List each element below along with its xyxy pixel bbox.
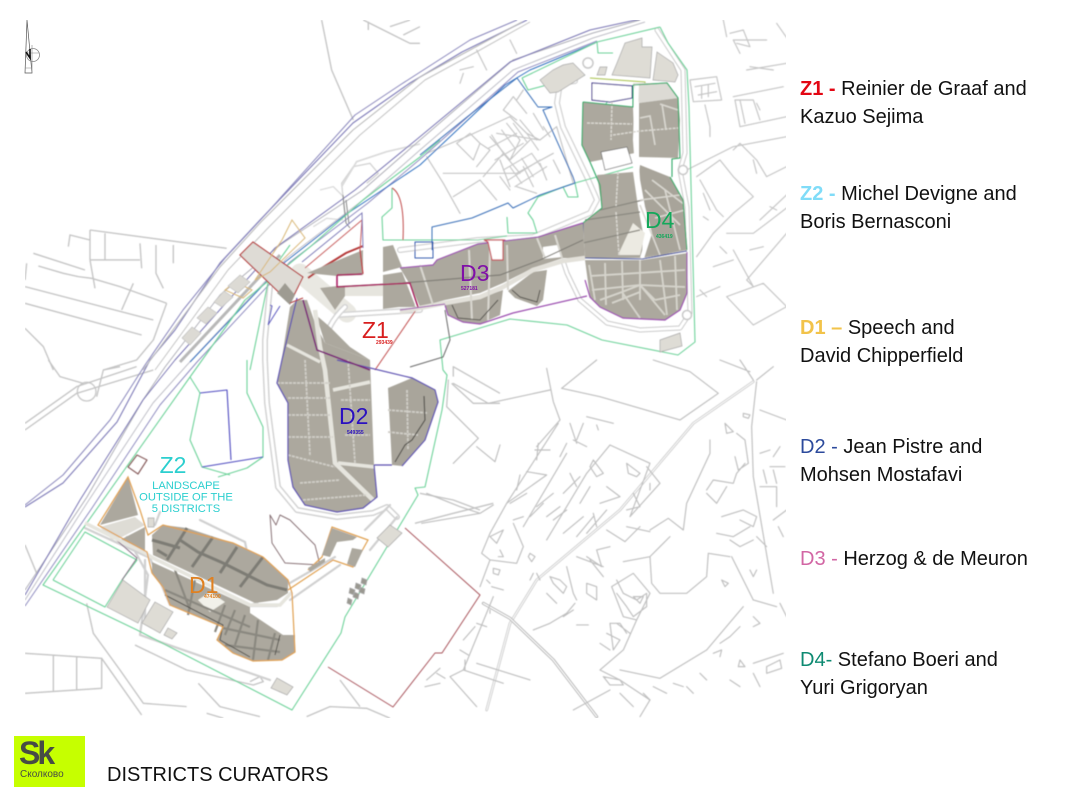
railway corridor (25, 18, 645, 606)
curator: Z2: Z2 - Michel Devigne and (800, 183, 1017, 205)
district D4 blocks (582, 83, 687, 320)
parcel outlines in blue and red (105, 78, 575, 707)
logo: Skolkovo: Sk (19, 736, 52, 771)
pale buildings (107, 38, 682, 695)
logo: Skolkovo: Сколково (20, 769, 64, 780)
label: Z2 landscape: 5 DISTRICTS (152, 503, 220, 515)
label: Z1: 293439 (376, 340, 393, 346)
label: Z2 landscape: Z2 (160, 452, 186, 478)
curator: Z2: Boris Bernasconi (800, 211, 951, 233)
curator: D4: Yuri Grigoryan (800, 677, 928, 699)
road network around districts (85, 30, 692, 680)
curator: D1 (800, 317, 963, 367)
village on the east side (422, 360, 787, 717)
curator: D2: Mohsen Mostafavi (800, 464, 962, 486)
curator: D2: D2 - Jean Pistre and (800, 436, 982, 458)
curator: D1: David Chipperfield (800, 345, 963, 367)
icon: north arrow (25, 20, 40, 73)
curator: D3: D3 - Herzog & de Meuron (800, 548, 1028, 570)
label: D2: D2 (339, 403, 368, 429)
curator: D4 (800, 649, 998, 699)
label: D3: D3 (460, 260, 489, 286)
district Z1 band and D2 blocks (277, 250, 438, 512)
surrounding roads, west and north (25, 20, 500, 718)
curator: Z1: Kazuo Sejima (800, 106, 923, 128)
label: D4: D4 (645, 207, 675, 233)
curator: Z1 (800, 78, 1027, 128)
label: Z2 landscape (139, 452, 233, 515)
site map (24, 20, 786, 718)
railway station parcels (182, 213, 363, 345)
title: DISTRICTS CURATORS (107, 764, 328, 786)
label: Z2 landscape: LANDSCAPE (152, 480, 220, 492)
logo: Skolkovo (14, 736, 85, 787)
curator: D2 (800, 436, 982, 486)
label: Z1: Z1 (362, 317, 389, 343)
label: D1: 474100 (204, 594, 221, 600)
label: D3: 527181 (461, 286, 478, 292)
label: D2: 549355 (347, 430, 364, 436)
district D1 blocks (85, 477, 368, 661)
district D3 blocks (383, 223, 587, 324)
label: Z2 landscape: OUTSIDE OF THE (139, 492, 233, 504)
buildings and roads north-east (427, 20, 788, 325)
label: D1: D1 (189, 572, 218, 598)
curator: D1: D1 – Speech and (800, 317, 955, 339)
curator: D4: D4- Stefano Boeri and (800, 649, 998, 671)
label: D4: 436419 (656, 234, 673, 240)
site boundary (43, 27, 695, 710)
curator: Z2 (800, 183, 1017, 233)
curator: Z1: Z1 - Reinier de Graaf and (800, 78, 1027, 100)
